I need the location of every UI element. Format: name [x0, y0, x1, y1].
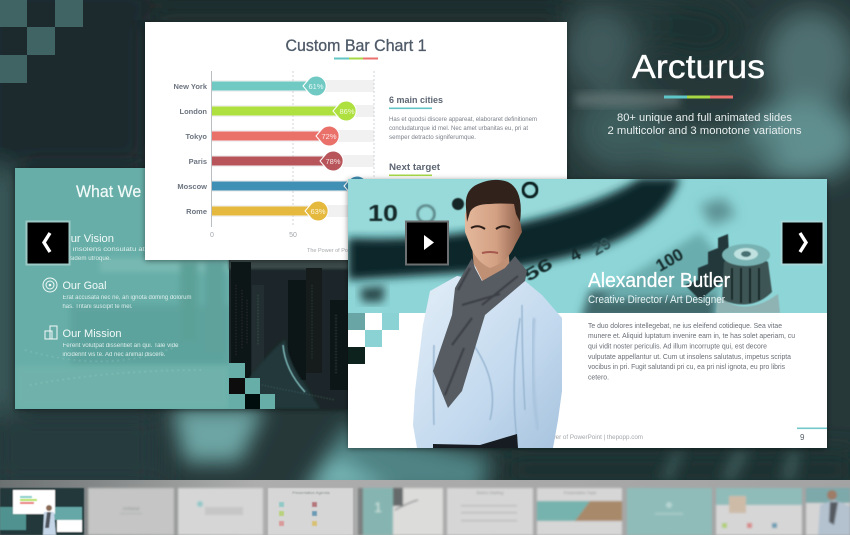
bar: Rome 63%	[212, 201, 328, 221]
colour rule	[664, 96, 733, 98]
vision text: Ita insolens consulatu at mea	[62, 247, 163, 253]
vision text	[62, 233, 163, 262]
hair	[466, 180, 521, 222]
side text: 6 main cities: Has et quodsi discere appareat, elaboraret definitionem	[389, 116, 537, 123]
vision text: Our Vision	[62, 233, 114, 245]
bar: Tokyo 72%: 72%	[321, 132, 337, 141]
product name: Arcturus	[632, 48, 765, 85]
city labels: Rome	[186, 207, 207, 216]
bar: New York 61%	[212, 76, 326, 96]
center play button	[406, 222, 448, 264]
bio text: qui vidit noster periculis. Ad illum incorrupte qui, est decore	[588, 342, 767, 350]
footer: The Power of PowerPoint | thepopp.com	[531, 434, 643, 441]
dial numbers: 56	[520, 254, 556, 285]
face	[465, 197, 522, 268]
dark city photo	[229, 255, 348, 409]
dial numbers	[368, 204, 684, 281]
tagline	[608, 112, 802, 137]
tagline: 80+ unique and full animated slides	[617, 112, 793, 124]
thumb 3	[178, 488, 263, 535]
bar: Tokyo 72%	[212, 126, 339, 146]
axis labels: 0	[210, 232, 214, 239]
thumb 6: Before Starting	[477, 490, 503, 495]
bar: London 86%: 86%	[339, 107, 355, 116]
bar tracks and axes	[212, 71, 374, 227]
thumb 7: Presentation Topic	[564, 490, 596, 495]
city labels: Moscow	[177, 182, 207, 191]
dial numbers: 100	[652, 245, 687, 275]
panel: bar chart slide	[145, 22, 567, 260]
title underline	[334, 58, 378, 60]
side text: next target: Next target	[389, 162, 441, 173]
thumb 4: Presentation Agenda	[292, 490, 330, 495]
city labels: Tokyo	[185, 132, 207, 141]
pixel stair squares	[229, 363, 275, 409]
side text: 6 main cities: semper detracto signiferumque.	[389, 134, 476, 141]
right arrow button	[782, 222, 824, 264]
side text: 6 main cities: 6 main cities	[389, 95, 443, 106]
trousers	[433, 434, 518, 448]
thumb 1	[0, 488, 84, 535]
city labels	[174, 82, 208, 216]
panel: profile slide	[348, 178, 827, 448]
heading: what we: What We Do	[76, 182, 166, 201]
thumb 5	[358, 488, 443, 535]
bar: Moscow	[212, 176, 367, 196]
role: Creative Director / Art Designer	[588, 294, 725, 306]
bar: London 86%	[212, 101, 356, 121]
pixel squares	[348, 313, 399, 364]
thumb 7	[537, 488, 622, 535]
goal text	[62, 280, 192, 310]
page number	[797, 428, 827, 442]
bar: Paris 78%	[212, 151, 343, 171]
goal text: Our Goal	[62, 280, 106, 292]
city labels: Paris	[189, 157, 207, 166]
thumb 9	[716, 488, 802, 535]
goal text: has. Tritani suscipit te mel.	[62, 304, 133, 310]
gear teeth	[685, 234, 730, 300]
dial numbers: 4	[566, 244, 585, 265]
sky and city tint	[30, 258, 228, 385]
axis labels: 50	[289, 232, 297, 239]
goal text: Erat accusata nec ne, an ignota doming dolorum	[62, 295, 192, 301]
crown knob	[716, 244, 780, 313]
chart footer: The Power of PowerPoint	[307, 248, 370, 254]
thumb 2: Arcturus	[123, 506, 140, 511]
mission text: inciderint vis te. Ad nec animal discere.	[62, 352, 166, 358]
header photo: dial	[348, 178, 827, 320]
page number: 9	[800, 433, 805, 442]
bio text: vocibus in pri. Fugit salutandi pri cu, ea pri nisl ignota, eu pro libris	[588, 362, 785, 371]
scarf	[433, 256, 527, 408]
dial numbers: 29	[588, 234, 614, 259]
bio text: munere et. Aliquid luptatum invenire eam in, te has solet aperiam, cu	[588, 331, 795, 340]
tagline: 2 multicolor and 3 monotone variations	[608, 125, 802, 137]
thumb 8	[627, 488, 712, 535]
collar	[474, 264, 494, 290]
side text: 6 main cities	[389, 95, 537, 141]
bio text: Te duo dolores intellegebat, ne ius eleifend cotidieque. Sea vitae	[588, 321, 782, 330]
bar: Rome 63%: 63%	[310, 207, 326, 216]
bar: New York 61%: 61%	[308, 82, 324, 91]
left arrow button	[26, 222, 70, 264]
side text: 6 main cities: concludaturque id mel. Nec amet urbanitas eu, pri at	[389, 125, 528, 132]
portrait	[413, 180, 562, 448]
eyes and mouth	[471, 226, 510, 229]
thumb 4	[268, 488, 353, 535]
thumb 6	[447, 488, 533, 535]
thumb 10	[806, 488, 850, 535]
thumb 5: 1	[374, 499, 382, 515]
dial numbers: 10	[368, 200, 398, 226]
panel: what we do slide	[15, 168, 348, 409]
icon: buildings	[45, 326, 57, 339]
city labels: New York	[174, 82, 208, 91]
chart title: Custom Bar Chart 1	[286, 37, 426, 55]
axis labels	[210, 232, 297, 239]
mission text	[62, 328, 179, 358]
shirt	[413, 276, 562, 448]
bio text	[588, 321, 795, 382]
thumb 2	[88, 488, 174, 535]
name: Alexander Butler	[588, 270, 730, 292]
bio text: cetero.	[588, 372, 609, 382]
title block	[608, 48, 802, 137]
mission text: Ferent volutpat dissentiet an qui. Tale vide	[62, 343, 179, 349]
mission text: Our Mission	[62, 328, 122, 340]
thumbnail strip	[0, 480, 850, 535]
decorative pixel squares top-left	[0, 0, 83, 83]
vision text: dissidem utroque.	[62, 256, 111, 262]
city labels: London	[180, 107, 207, 116]
neck	[472, 245, 510, 282]
bar: Paris 78%: 78%	[325, 157, 341, 166]
icon: target	[43, 278, 57, 292]
bio text: vulputate appellantur ut. Cum ut insolens salutatus, impetus scripta	[588, 352, 791, 361]
